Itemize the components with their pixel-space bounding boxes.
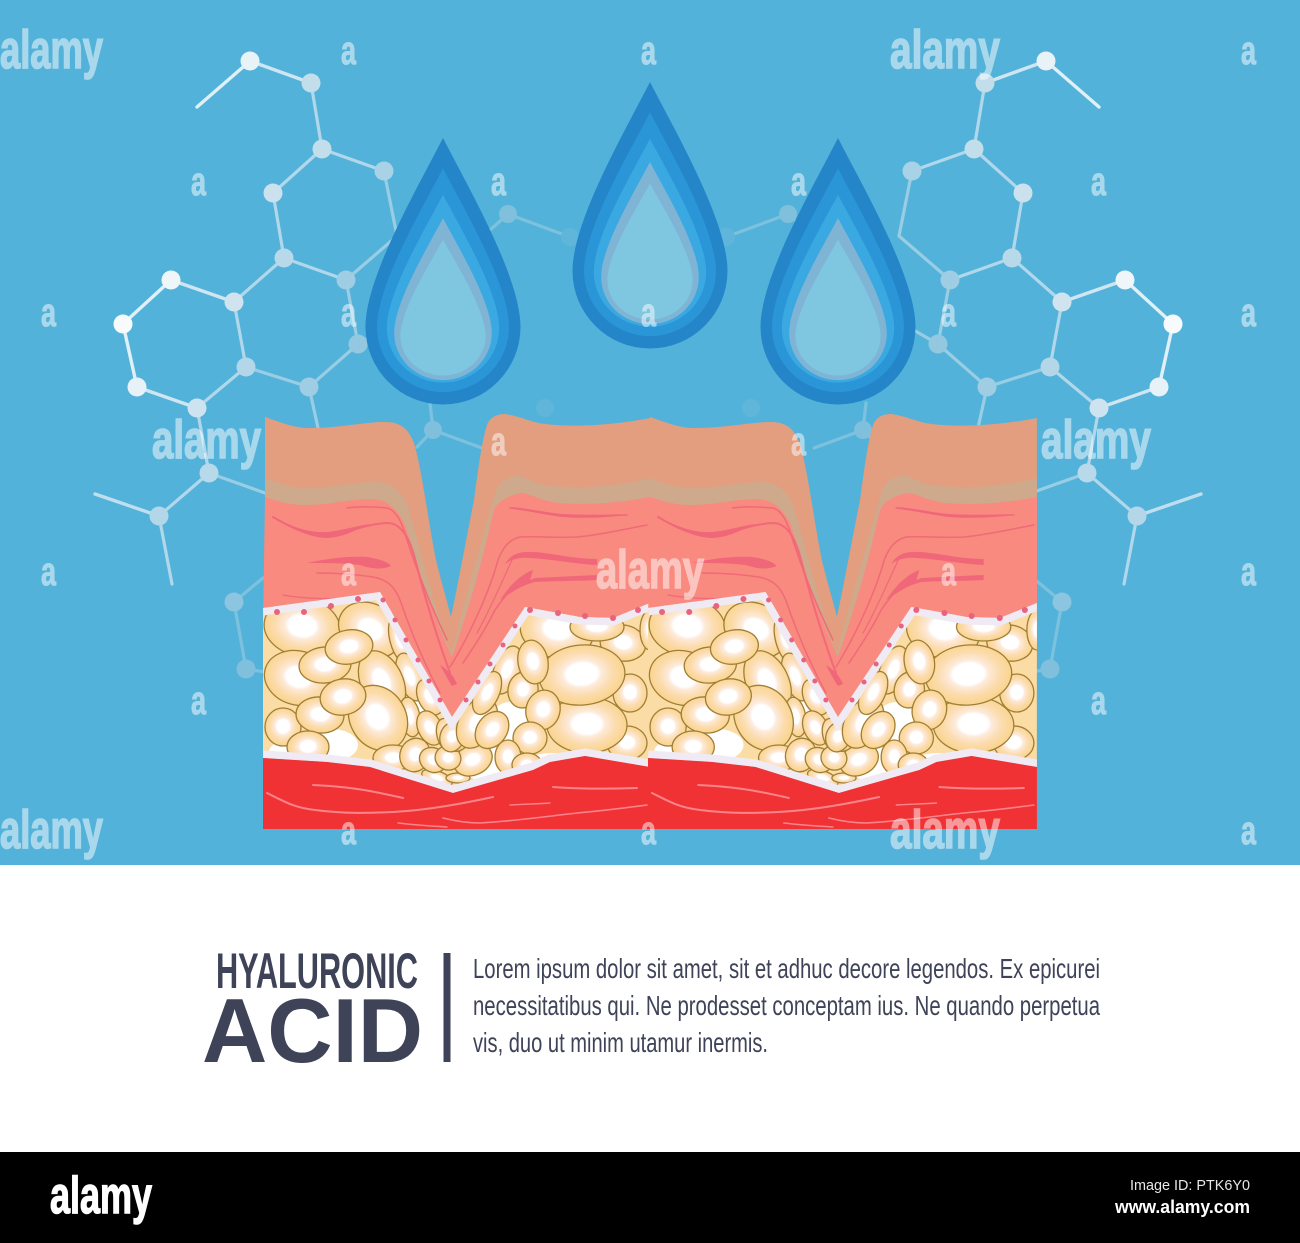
watermarks: a	[41, 550, 57, 594]
muscle fibres	[267, 785, 647, 827]
watermarks: alamy	[0, 20, 103, 80]
dermis fibres	[273, 507, 647, 693]
white text band	[0, 865, 1300, 1152]
molecule network: right	[717, 52, 1201, 678]
watermarks: a	[341, 550, 357, 594]
muscle layer	[263, 756, 650, 829]
watermarks: alamy	[596, 540, 704, 600]
dermis layer	[263, 493, 650, 725]
watermarks	[0, 20, 1257, 860]
black footer bar	[0, 1152, 1300, 1243]
footer image id: Image ID: PTK6Y0	[1130, 1177, 1250, 1194]
watermarks: a	[191, 679, 207, 723]
watermarks: a	[1241, 29, 1257, 73]
watermarks: a	[341, 29, 357, 73]
watermarks: a	[341, 291, 357, 335]
watermarks: a	[1091, 679, 1107, 723]
watermarks: alamy	[890, 20, 1000, 80]
watermarks: a	[641, 809, 657, 853]
title: Hyaluronic Acid: ACID	[202, 981, 423, 1082]
skin cross-section: left tile	[258, 414, 660, 829]
watermarks: a	[1091, 160, 1107, 204]
watermarks: alamy	[1041, 410, 1151, 470]
watermarks: a	[941, 550, 957, 594]
watermarks: a	[341, 809, 357, 853]
watermarks: alamy	[890, 800, 1000, 860]
fat layer with cells	[258, 590, 660, 795]
skin cross-section: right tile	[643, 414, 1047, 829]
watermarks: alamy	[0, 800, 103, 860]
watermarks: a	[1241, 291, 1257, 335]
epidermis layer	[265, 414, 650, 665]
watermarks: a	[491, 160, 507, 204]
watermarks: a	[641, 291, 657, 335]
pink dots along fat boundary	[274, 596, 641, 702]
watermarks: a	[491, 420, 507, 464]
icon: right water drop	[760, 138, 916, 404]
watermarks: a	[191, 160, 207, 204]
blue header background	[0, 0, 1300, 865]
watermarks: a	[1241, 809, 1257, 853]
watermarks: alamy	[152, 410, 261, 470]
watermarks: a	[791, 420, 807, 464]
vertical divider	[444, 953, 450, 1062]
body text	[473, 953, 1100, 1058]
body text: vis, duo ut minim utamur inermis.	[473, 1027, 768, 1058]
watermarks: a	[41, 291, 57, 335]
footer website: www.alamy.com	[1114, 1197, 1250, 1217]
title: Hyaluronic Acid: HYALURONIC	[216, 943, 418, 999]
tan layer	[265, 475, 650, 665]
watermarks: a	[641, 29, 657, 73]
watermarks: a	[941, 291, 957, 335]
icon: center water drop	[572, 82, 728, 348]
icon: left water drop	[366, 138, 520, 404]
watermarks: a	[791, 160, 807, 204]
footer logo: alamy	[50, 1167, 152, 1225]
molecule network: left	[95, 52, 579, 678]
watermarks: a	[1241, 550, 1257, 594]
